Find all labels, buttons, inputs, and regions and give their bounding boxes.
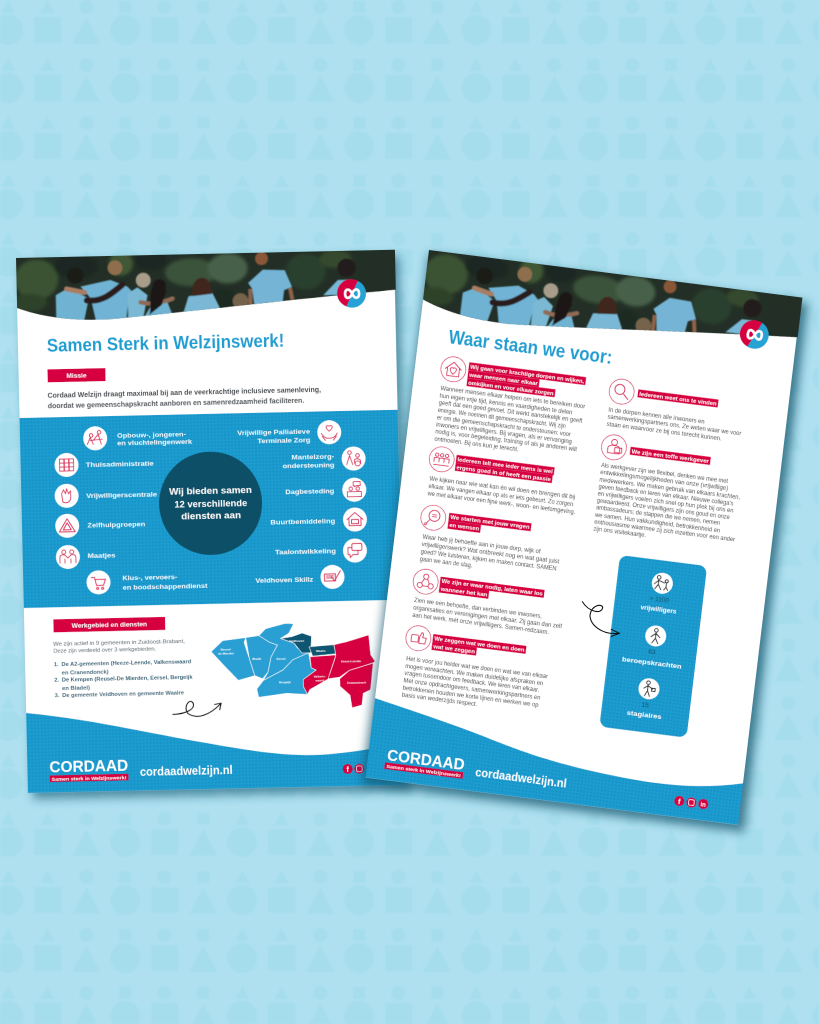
service labels right: Buurtbemiddeling [270,518,335,526]
body text: Zien we een behoefte, dan verbinden we inwoners, [414,597,543,620]
body text: Het is voor jou helder wat we doen en wat we van elkaar [406,656,548,681]
icon: employee [600,433,628,461]
panel: statistics card [599,555,707,738]
body text: staan en waarvoor ze bij ons terecht kunnen. [606,421,722,443]
body text: betrokkenen houden we korte lijnen en werken we op [402,685,539,709]
work area text [53,639,194,699]
central circle: diensten aan [181,510,241,522]
highlight heading: ergens goed in of heeft een passie [456,465,552,483]
body text [426,475,578,516]
highlight heading: omkijken en voor elkaar zorgen [468,380,554,397]
body text [434,385,586,461]
work area text: en Bladel) [62,686,90,692]
central circle [158,451,263,556]
body text: vragen tussendoor om feedback. We leren van elkaar. [404,670,540,694]
panel: right page [360,244,803,825]
icon: house [439,355,467,383]
icon: maatjes [56,545,80,569]
title: Samen Sterk in Welzijnswerk! [47,331,285,356]
stat: stagiaires: 15 [641,701,650,709]
icon: thumbs up [404,624,432,652]
panel: left page [10,245,407,793]
icon: dagbesteding [342,477,367,502]
map of municipalities [210,621,376,711]
shadow: left page [21,256,411,799]
social icons right [674,795,709,810]
website left: cordaadwelzijn.nl [140,763,233,779]
icon: network [412,568,440,596]
body text: In de dorpen kennen alle inwoners en [608,406,705,426]
highlight heading: We zijn een toffe werkgever [631,449,710,465]
section: te vinden [605,378,746,445]
service labels right: Vrijwillige Palliatieve [237,429,311,437]
section: waar nodig [409,568,567,638]
stat: stagiaires: stagiaires [626,710,662,721]
body text: organisaties en verenigingen met elkaar. Zij gaan dan zelf [413,605,563,630]
title: Waar staan we voor: [447,327,613,369]
body text: Wanneer mensen elkaar helpen om iets te bereiken door [440,385,586,410]
highlight heading: We zijn er waar nodig, laten waar los [441,579,544,598]
icon: magnifier [608,378,636,406]
highlight heading: We zeggen wat we doen en doen [434,636,525,654]
body text: gewaardeerd. Onze vrijwilligers zijn ons goud en onze [596,497,731,521]
body text: elkaar. We vangen elkaar op als er iets gebeurt. Zo zorgen [428,483,574,508]
panel: services band [20,410,402,608]
map of municipalities: Waalre [316,649,326,653]
service labels right [237,428,337,585]
highlight heading [431,634,526,662]
section: zeggen wat we doen [399,624,552,717]
body text: ambassadeurs; de stappen die we nemen, nemen [596,504,720,527]
work area text: 1. [54,662,59,668]
map of municipalities: Cranendonck [347,681,366,685]
icon: mantelzorg [341,446,366,471]
body text: Als werkgever zijn we flexibel, denken we mee met [601,462,729,485]
map of municipalities: Heeze-Leende [341,659,361,663]
highlight heading: wat we zeggen [432,644,476,656]
work area text: We zijn actief in 9 gemeenten in Zuidoost-Brabant, [53,639,185,648]
stat: stagiaires [626,676,666,721]
map of municipalities: de Mierden [218,651,234,656]
section: krachtige dorpen [432,355,589,461]
body text: We kijken naar wie wat kan én wil doen en brengen dit bij [429,476,575,501]
mission text: doordat we gemeenschapskracht aanboren en samenredzaamheid faciliteren. [48,396,304,410]
service labels left: Zelfhulpgroepen [87,521,146,530]
service labels left: Vrijwilligerscentrale [86,492,158,500]
icon: vrijwilligerscentrale [54,484,79,508]
section: iedereen telt mee [425,445,581,516]
icon: winkelwagen [86,570,111,595]
work area text: Deze zijn verdeeld over 3 werkgebieden. [53,647,157,655]
body text: basis van wederzijds respect. [401,692,478,708]
highlight heading [455,455,555,483]
body text: en vrijwilligers voelen zich snel op hun plek bij ons en [597,490,734,515]
work area text: De gemeente Veldhoven en gemeente Waalre [62,690,184,699]
body text: goed? We luisteren, kijken en maken contact. SAMEN [420,548,557,573]
body text: we samen. Hun vakkundigheid, betrokkenheid en [594,511,720,534]
social icons left: f [346,765,350,774]
arrow left [173,701,221,717]
work area text: 3. [55,693,60,699]
work area text: 2. [54,678,60,684]
shadow: right page [362,254,808,832]
service labels right: Veldhoven Skillz [255,577,313,585]
icon: taalontwikkeling [343,538,367,563]
work area text: en Cranendonck) [62,669,109,677]
highlight heading: en wensen [449,523,480,533]
body text: energie. We noemen dit gemeenschapskracht. Wij zijn [437,407,566,430]
highlight heading: Iedereen weet ons te vinden [639,392,717,407]
work area text: De Kempen (Reusel-De Mierden, Eersel, Bergeijk [62,675,194,684]
highlight heading [439,577,545,606]
mission text [48,385,321,410]
body text: vrijwilligerswerk? Wat ontbreekt nog en wat gaat juist [421,541,560,566]
body text: nodig is, voor begeleiding, training of als je anderen wilt [435,428,578,453]
map of municipalities: Eersel [277,657,286,661]
label: Missie: Missie [66,373,87,380]
icon: speech bubbles [419,504,447,532]
stat: beroepskrachten: beroepskrachten [622,656,682,671]
body text: we met elkaar voor een fijne werk-, woon- en leefomgeving. [426,490,576,516]
footer wave left [26,705,406,793]
body text: Met onze opdrachtgevers, samenwerkingspartners en [403,677,541,702]
service labels right: Mantelzorg- [291,454,334,462]
body text: er om die gemeenschapskracht te ondersteunen: voor [437,414,571,438]
service labels left: en boodschappendienst [123,583,209,592]
map of municipalities: Bergeijk [279,680,291,684]
service labels left [85,431,209,592]
body text: samenwerkingspartners ons. Ze weten waar we voor [607,414,742,438]
map of municipalities: Valkens- [314,674,326,678]
arrow right [582,602,619,636]
map of municipalities: Veldhoven [289,639,304,643]
body text: medewerkers. We maken gebruik van elkaars krachten, [599,476,741,501]
highlight heading: Iedereen telt mee ieder mens is wel [457,457,553,475]
photo banner right [415,244,803,367]
service labels left: en vluchtelingenwerk [117,439,193,447]
label: Missie [47,368,106,382]
footer logo left: Samen sterk in Welzijnswerk! [52,775,127,782]
service labels right: Dagbesteding [285,488,334,496]
body text: Waar heb jij behoefte aan in jouw dorp, wijk of [422,534,541,556]
highlight heading: waar mensen naar elkaar [468,372,539,387]
highlight heading: We starten met jouw vragen [450,515,530,531]
icon: buurtbemiddeling [343,507,367,532]
label: Werkgebied en diensten [53,617,165,632]
social icons right: f [677,797,682,806]
service labels right: Taalontwikkeling [275,548,336,556]
service labels left: Klus-, vervoers- [122,574,177,582]
section: toffe werkgever [591,433,746,550]
icon: opbouw [83,426,107,451]
footer logo right: Samen sterk in Welzijnswerk! [386,764,462,778]
body text: entwikkelingsmogelijkheden van onze (vrijwillige) [600,469,728,492]
stat: beroepskrachten: 63 [648,648,656,656]
body text: hun eigen vrije tijd, kennis en vaardigheden te delen [439,392,573,416]
service labels left: Thuisadministratie [86,461,154,469]
social icons left [343,764,364,774]
work area text: De A2-gemeenten (Heeze-Leende, Valkenswaard [61,659,192,668]
body text: zijn ons visitekaartje. [593,526,647,539]
body text [412,597,563,638]
highlight heading [466,362,586,401]
service labels right: Terminale Zorg [257,437,310,445]
stat: vrijwilligers: > 1100 [649,595,670,605]
footer logo right: CORDAAD [386,747,466,774]
icon: thuisadministratie [54,453,79,477]
body text: ontmoeten. Bij ons kun je terecht. [434,436,519,453]
body text [419,534,561,580]
body text [592,462,742,550]
highlight heading: wanneer het kan [439,587,488,599]
icon: veldhoven skillz [320,565,345,589]
stat: vrijwilligers [640,570,681,616]
footer logo left: CORDAAD [49,758,128,777]
logo badge right [738,319,770,350]
icon: people [428,445,456,473]
map of municipalities: Reusel- [221,648,231,652]
central circle: Wij bieden samen [169,485,252,497]
central circle: 12 verschillende [174,498,247,509]
body text: mogen verwachten. We maken duidelijke afspraken en [405,663,543,687]
stat: beroepskrachten [622,622,686,671]
highlight heading: Wij gaan voor krachtige dorpen en wijken, [470,365,585,385]
body text: geeft dat een goed gevoel. Dit werkt aanstekelijk en geeft [438,400,583,425]
highlight heading [447,513,532,539]
body text: enthousiasme waarmee zij zich inzetten voor een ander [594,518,735,543]
service labels left: Opbouw-, jongeren- [117,431,186,440]
body text: gaan we aan de slag. [419,556,473,570]
body text: aan het werk, mét onze vrijwilligers. Samen-redzaam. [412,612,550,636]
logo badge left [337,279,366,308]
icon: zelfhulpgroepen [55,514,79,538]
footer wave right [365,698,748,825]
body text [606,406,743,445]
mission text: Cordaad Welzijn draagt maximaal bij aan de veerkrachtige inclusieve samenleving, [48,385,321,400]
label: Werkgebied en diensten: Werkgebied en diensten [72,621,147,630]
body text: inwoners en vrijwilligers. Bij vragen, als er vervanging [436,421,572,446]
service labels left: Maatjes [87,552,116,560]
service labels right: ondersteuning [283,462,335,470]
body text [401,656,548,717]
website right: cordaadwelzijn.nl [475,765,567,791]
social icons right: in [700,802,706,809]
stat: vrijwilligers: vrijwilligers [640,604,677,616]
map of municipalities: Bladel [252,657,261,661]
body text: geven feedback en leren van elkaar. Nieuwe collega's [598,483,734,507]
section: jouw vragen [415,504,564,580]
map of municipalities: waard [314,678,324,682]
icon: palliatieve zorg [317,420,341,445]
photo banner left [10,245,397,328]
